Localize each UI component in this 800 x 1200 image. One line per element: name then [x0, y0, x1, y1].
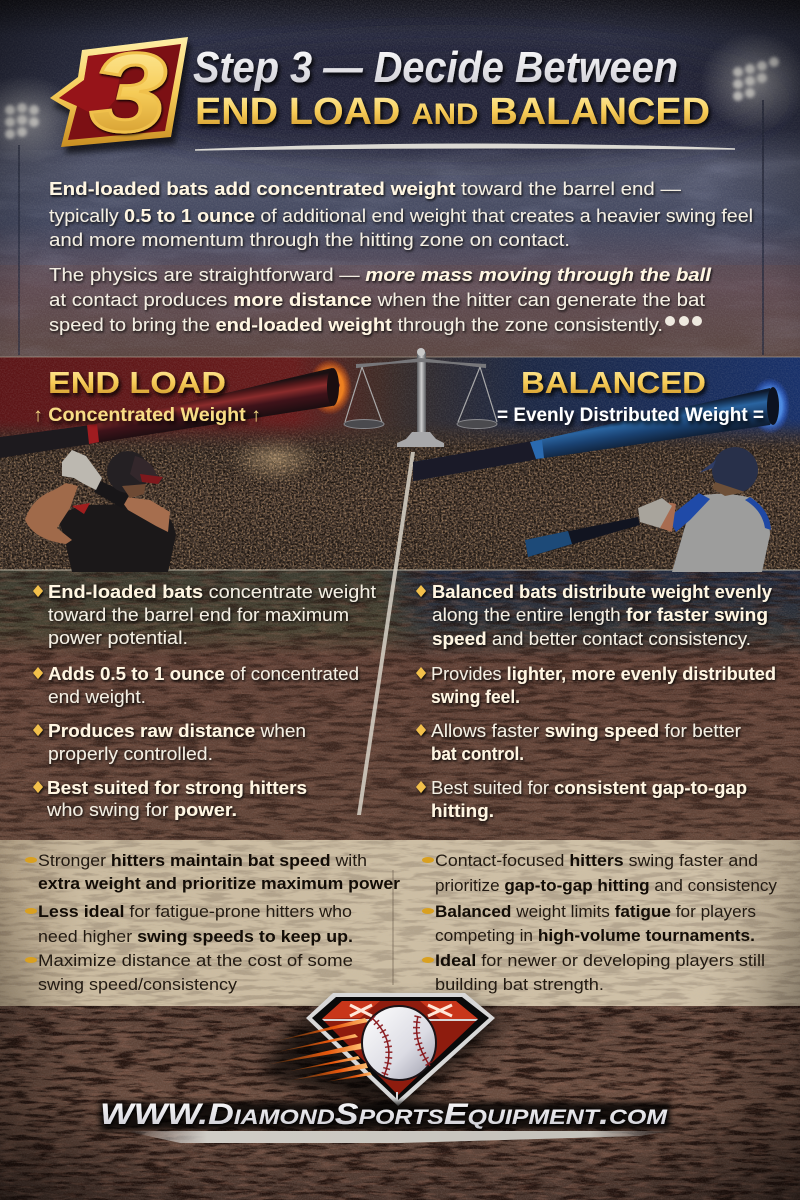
- intro paragraph 1: End-loaded bats add concentrated weight toward the barrel end —: [49, 179, 681, 199]
- center dividing chalk line: [357, 452, 415, 815]
- footer website url: WWW.DiamondSportsEquipment.com: [100, 1098, 668, 1131]
- note: ideal for newer: [422, 951, 765, 994]
- bullet: strong hitters: Best suited for strong hitters: [47, 778, 307, 798]
- jersey: [672, 494, 770, 572]
- bullet: swing feel: [416, 664, 776, 707]
- end load batter: [25, 450, 176, 572]
- bullet: strong hitters: [33, 778, 307, 820]
- note: stronger hitters: extra weight and prioritize maximum power: [38, 874, 400, 893]
- note: balanced weight: [422, 902, 756, 945]
- note: ideal for newer: building bat strength.: [435, 975, 604, 994]
- front arm: [118, 496, 170, 532]
- evenly distributed weight subheading: = Evenly Distributed Weight =: [497, 405, 764, 426]
- bullet: bat control: Allows faster swing speed for better: [431, 721, 741, 741]
- balanced heading: BALANCED: [521, 365, 706, 400]
- title: [193, 43, 710, 133]
- helmet: [712, 447, 758, 493]
- end load bat: [0, 359, 352, 458]
- note: less ideal: [25, 902, 353, 946]
- bullet: swing feel: Provides lighter, more evenly distributed: [431, 664, 776, 684]
- note: stronger hitters: Stronger hitters maintain bat speed with: [38, 851, 367, 870]
- bullet: concentrate weight: power potential.: [48, 628, 188, 648]
- balanced label: [497, 365, 764, 426]
- note: stronger hitters: [25, 851, 400, 893]
- bullet: raw distance: Produces raw distance when: [48, 721, 306, 741]
- bullet: strong hitters: who swing for power.: [46, 800, 237, 820]
- panel: end load bullets: [33, 582, 376, 820]
- note: balanced weight: Balanced weight limits fatigue for players: [435, 902, 756, 921]
- panel: balanced bullets: [416, 582, 776, 821]
- bullet: gap-to-gap: Best suited for consistent gap-to-gap: [431, 778, 747, 798]
- gloves: [638, 498, 672, 528]
- intro paragraph 2: speed to bring the end-loaded weight through the zone consistently.: [49, 315, 663, 335]
- bullet: adds weight: Adds 0.5 to 1 ounce of concentrated: [48, 664, 359, 684]
- bullet: raw distance: [33, 721, 306, 764]
- bullet: bat control: bat control.: [431, 744, 524, 764]
- note: contact-focused: Contact-focused hitters swing faster and: [435, 851, 758, 870]
- swung bat: [525, 517, 640, 557]
- baseball: [362, 1006, 436, 1080]
- bullet: distribute weight: Balanced bats distribute weight evenly: [432, 582, 772, 602]
- bullet: adds weight: [33, 664, 359, 707]
- intro paragraph 1: [49, 179, 753, 250]
- icon: balance scale: [344, 348, 497, 447]
- background: stadium sky: [0, 0, 800, 360]
- end load label: [33, 365, 261, 426]
- intro paragraph 2: [49, 265, 712, 335]
- helmet: [107, 451, 149, 493]
- bullet: concentrate weight: [33, 582, 376, 648]
- panel: end load hitter notes: [25, 851, 400, 994]
- bullet: concentrate weight: toward the barrel end for maximum: [48, 605, 349, 625]
- background: infield dirt: [0, 569, 800, 842]
- bullet: gap-to-gap: [416, 778, 747, 821]
- bullet: adds weight: end weight.: [48, 687, 146, 707]
- bullet: raw distance: properly controlled.: [48, 744, 213, 764]
- note: maximize distance: Maximize distance at the cost of some: [38, 951, 353, 970]
- balanced batter: [525, 447, 771, 572]
- concentrated weight subheading: ↑ Concentrated Weight ↑: [33, 405, 261, 426]
- title underline swoosh: [195, 144, 735, 150]
- panel: balanced hitter notes: [422, 851, 777, 994]
- end load heading: END LOAD: [48, 365, 226, 400]
- bullet: concentrate weight: End-loaded bats concentrate weight: [48, 582, 376, 602]
- intro paragraph 1: typically 0.5 to 1 ounce of additional end weight that creates a heavier swing feel: [49, 206, 753, 226]
- footer swoosh: [125, 1131, 672, 1143]
- logo: diamond with baseball: [260, 993, 505, 1115]
- bullet: distribute weight: [416, 582, 772, 649]
- background: stadium crowd: [0, 425, 800, 573]
- back arm: [25, 483, 78, 544]
- gloves: [62, 450, 102, 490]
- bullet: gap-to-gap: hitting.: [431, 801, 494, 821]
- title line 2: END LOAD AND BALANCED: [195, 91, 710, 133]
- background: red and blue team bands: [0, 356, 800, 457]
- note: ideal for newer: Ideal for newer or developing players still: [435, 951, 765, 970]
- note: less ideal: need higher swing speeds to keep up.: [38, 927, 353, 946]
- note: maximize distance: swing speed/consistency: [38, 975, 238, 994]
- bullet: bat control: [416, 721, 741, 764]
- panel: beige background: [0, 840, 800, 1007]
- intro paragraph 1: and more momentum through the hitting zone on contact.: [49, 230, 570, 250]
- note: maximize distance: [25, 951, 353, 994]
- note: balanced weight: competing in high-volume tournaments.: [435, 926, 755, 945]
- bullet: swing feel: swing feel.: [431, 687, 520, 707]
- intro paragraph 2: at contact produces more distance when the hitter can generate the bat: [49, 290, 705, 310]
- title line 1: Step 3 — Decide Between: [193, 43, 678, 92]
- bullet: distribute weight: along the entire length for faster swing: [432, 605, 768, 625]
- flame speed streaks: [265, 1018, 372, 1082]
- balanced bat: [413, 378, 790, 481]
- bullet: distribute weight: speed and better contact consistency.: [432, 629, 751, 649]
- decorative light dots: [665, 316, 702, 326]
- background: lower dirt: [0, 1006, 800, 1200]
- intro paragraph 2: The physics are straightforward — more mass moving through the ball: [49, 265, 712, 285]
- note: less ideal: Less ideal for fatigue-prone hitters who: [38, 902, 352, 921]
- note: contact-focused: [422, 851, 777, 895]
- jersey: [59, 502, 176, 572]
- note: contact-focused: prioritize gap-to-gap hitting and consistency: [435, 876, 777, 895]
- step 3 badge: [50, 30, 191, 155]
- badge numeral: 3: [90, 30, 167, 155]
